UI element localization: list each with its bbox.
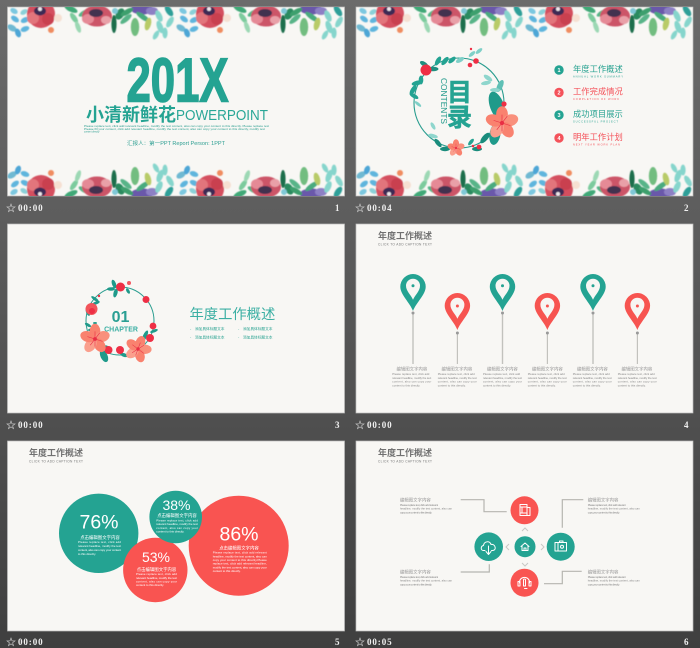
- callout: bottom right: headline, modify the text content, also can: [588, 579, 640, 583]
- direction chevrons: [506, 528, 544, 566]
- slide 1 footer: 00:00: [18, 203, 44, 213]
- pin text 3: content to this directly.: [483, 383, 511, 387]
- bubble 86%: copy your content to this directly.Please: [213, 558, 267, 562]
- icon: cloud download: [474, 532, 503, 561]
- item 4: NEXT YEAR WORK PLAN: [573, 142, 620, 146]
- item 3: 3: [557, 113, 561, 119]
- pin text 1: relevant headline, modify the text: [392, 376, 432, 380]
- slide 2 footer: [356, 203, 689, 213]
- callout: bottom left: 编辑图文字内容: [400, 568, 431, 576]
- slide 4 heading: 年度工作概述: [378, 230, 432, 241]
- pin 5: [580, 274, 606, 364]
- slide 5 footer: 5: [335, 637, 340, 647]
- pin 6: [625, 293, 650, 364]
- callout: top left: 编辑图文字内容: [400, 496, 431, 504]
- bubble 38%: Please replace text, click add: [156, 518, 198, 522]
- pin text 1: content to this directly.: [392, 383, 421, 387]
- bubble 76%: 点击编辑图文字内容: [80, 534, 120, 541]
- chapter number: 01: [112, 309, 130, 326]
- callout: top right: 编辑图文字内容: [588, 496, 619, 504]
- callout: top left: Please replace text, click add relevant: [400, 503, 438, 507]
- slide 5 footer: [7, 637, 340, 647]
- pin text 6: relevant headline, modify the text: [618, 376, 657, 380]
- pin text 4: [528, 366, 567, 387]
- pin text 6: content, also can copy your: [618, 380, 657, 384]
- slide 3 footer: 3: [335, 420, 340, 430]
- cover year: 201X: [126, 46, 228, 116]
- callout: bottom left: [400, 568, 452, 586]
- slide 6 heading: [378, 447, 432, 464]
- chapter bullets: 添加具体标题文本: [243, 334, 273, 340]
- pin text 2: 编辑图文字内容: [442, 366, 473, 372]
- bubble 38%: 点击编辑图文字内容: [157, 512, 197, 519]
- pin text 6: Please replace text, click add: [618, 372, 655, 376]
- cover presenter: 汇报人：第一PPT Report Person: 1PPT: [127, 140, 225, 147]
- slide 5 heading: 年度工作概述: [29, 447, 83, 458]
- callout: top right: headline, modify the text content, also can: [588, 507, 640, 511]
- contents heading: 目: [447, 79, 472, 107]
- pin 4: [535, 293, 560, 364]
- pin text 1: content, also can copy your: [392, 380, 431, 384]
- callout: bottom left: headline, modify the text content, also can: [400, 579, 452, 583]
- chapter bullets: 添加具体标题文本: [195, 334, 225, 340]
- bubble 38%: content, also can copy your: [156, 526, 198, 530]
- bubble 53%: 点击编辑图文字内容: [137, 566, 177, 573]
- item 2: [554, 86, 623, 101]
- pin text 5: relevant headline, modify the text: [573, 376, 612, 380]
- connector lines: [461, 500, 583, 584]
- slide 3 footer: [7, 420, 340, 430]
- chapter bullets: [190, 326, 273, 340]
- callout: bottom right: [588, 568, 640, 586]
- pin text 4: 编辑图文字内容: [532, 366, 563, 372]
- pin text 1: 编辑图文字内容: [396, 366, 428, 372]
- item 3: [554, 109, 623, 124]
- item 1: 年度工作概述: [573, 64, 623, 74]
- icon: headset: [510, 569, 538, 597]
- bubble 86%: headline, modify the text content, also can: [213, 554, 267, 558]
- contents heading: [439, 78, 472, 132]
- bubble 38%: content to this directly.: [156, 530, 184, 534]
- callout: bottom left: copy your content to this directly.: [400, 582, 432, 586]
- slide 4 footer: 4: [684, 420, 689, 430]
- callout: bottom right: 编辑图文字内容: [588, 568, 619, 576]
- pin text 6: content to this directly.: [618, 383, 646, 387]
- chapter bullets: 添加具体标题文本: [243, 326, 273, 331]
- slide 4 footer: 00:00: [367, 420, 392, 430]
- bubble 86%: modify the text content, also can copy your: [213, 565, 267, 569]
- callout: top left: [400, 496, 452, 514]
- bubble 86%: content to this directly.: [213, 569, 241, 573]
- pin text 6: 编辑图文字内容: [622, 366, 653, 372]
- bubble 53%: [123, 538, 188, 602]
- bubble 76%: to this directly.: [78, 552, 96, 556]
- slide 5: percentage bubbles: [8, 441, 344, 631]
- slide 1 footer: [7, 203, 340, 213]
- pin 3: [490, 274, 515, 364]
- slide 2 footer: 2: [684, 203, 689, 213]
- slide 3: chapter: [8, 224, 344, 413]
- callout: top right: [588, 496, 640, 514]
- pin text 2: content to this directly.: [438, 383, 466, 387]
- contents heading: 录: [447, 104, 472, 132]
- cover description: content directly: [84, 130, 100, 134]
- chapter bullets: -: [238, 336, 240, 340]
- item 4: [554, 132, 623, 146]
- pin text 2: relevant headline, modify the text: [438, 376, 477, 380]
- bubble 38%: [149, 491, 202, 543]
- bubble 76%: 76%: [79, 512, 119, 534]
- pin text 4: content, also can copy your: [528, 380, 567, 384]
- slide 5 footer: 00:00: [18, 637, 44, 647]
- callout: top right: copy your content to this directly.: [588, 510, 620, 514]
- item 1: 1: [557, 68, 561, 74]
- pin text 5: content to this directly.: [573, 383, 601, 387]
- slide 5 heading: [29, 447, 83, 464]
- icon: camera: [547, 533, 575, 561]
- slide 4 footer: [356, 420, 689, 430]
- callout: top left: headline, modify the text content, also can: [400, 507, 452, 511]
- slide 6: icon diagram: [356, 441, 693, 631]
- slide 2: contents: [355, 0, 693, 203]
- chapter bullets: -: [238, 327, 240, 331]
- item 3: SUCCESSFUL PROJECT: [573, 120, 618, 124]
- cover description: Please fill your content, click add relevant headline, modify the text content, also can copy your content to this directly, modify text: [84, 128, 265, 131]
- bubble 38%: 38%: [162, 497, 191, 513]
- bubble 86%: replace text, click add relevant headline,: [213, 562, 267, 566]
- item 3: 成功项目展示: [573, 109, 623, 119]
- pin text 3: Please replace text, click add: [483, 372, 520, 376]
- pin text 3: content, also can copy your: [483, 380, 522, 384]
- bubble 38%: relevant headline, modify the text: [156, 522, 198, 526]
- pin text 5: 编辑图文字内容: [577, 366, 608, 372]
- slide 3 footer: 00:00: [18, 420, 44, 430]
- pin text 1: Please replace text, click add: [392, 372, 430, 376]
- icon: film: [510, 496, 538, 524]
- chapter bullets: -: [190, 327, 192, 331]
- chapter label: CHAPTER: [104, 326, 138, 334]
- pin text 5: content, also can copy your: [573, 380, 612, 384]
- pin text 6: [618, 366, 657, 387]
- pin text 4: content to this directly.: [528, 383, 556, 387]
- slide 6 heading: CLICK TO ADD CAPTION TEXT: [378, 460, 432, 464]
- cover title: POWERPOINT: [176, 107, 268, 124]
- item 4: 4: [557, 136, 561, 142]
- item 4: 明年工作计划: [573, 132, 623, 142]
- callout: top left: copy your content to this directly.: [400, 510, 432, 514]
- slide 1: cover: [6, 0, 345, 203]
- pin 1: [400, 274, 426, 364]
- bubble 86%: 点击编辑图文字内容: [219, 544, 259, 552]
- contents heading: CONTENTS: [439, 78, 449, 124]
- floral border: contents: [355, 0, 693, 203]
- bubble 86%: Please replace text, click add relevant: [213, 550, 267, 554]
- chapter bullets: -: [190, 336, 192, 340]
- pin text 5: Please replace text, click add: [573, 372, 610, 376]
- cover title: [86, 104, 268, 125]
- bubble 53%: content, also can copy your: [136, 580, 177, 584]
- pin text 2: Please replace text, click add: [438, 372, 475, 376]
- slide 4 heading: [378, 230, 432, 246]
- slide 4: map pins: [356, 224, 693, 413]
- pin 2: [445, 293, 470, 364]
- wreath: contents: [408, 47, 520, 157]
- slide 6 footer: [356, 637, 689, 647]
- cover description: Please replace text, click add relevant headline, modify the text content, also can copy your content to this directly. Please replace text: [84, 125, 269, 128]
- slide 5 heading: CLICK TO ADD CAPTION TEXT: [29, 460, 83, 464]
- pin text 2: [438, 366, 477, 387]
- bubble 76%: Please replace text, click add: [78, 540, 121, 544]
- bubble 53%: relevant headline, modify the text: [136, 576, 177, 580]
- pin text 1: [392, 366, 432, 387]
- callout: bottom left: Please replace text, click add relevant: [400, 575, 438, 579]
- item 1: ANNUAL WORK SUMMARY: [573, 74, 623, 78]
- pin text 5: [573, 366, 612, 387]
- slide 1 footer: 1: [335, 203, 340, 213]
- cover description: [84, 125, 269, 134]
- item 2: 2: [557, 90, 561, 96]
- bubble 53%: content to this directly.: [136, 583, 164, 587]
- slide 2 footer: 00:04: [367, 203, 392, 213]
- bubble 86%: 86%: [219, 524, 259, 546]
- bubble 86%: [189, 496, 289, 596]
- pin text 3: [483, 366, 522, 387]
- pin text 4: relevant headline, modify the text: [528, 376, 567, 380]
- slide 6 footer: 6: [684, 637, 689, 647]
- floral border: cover: [6, 0, 344, 203]
- callout: bottom right: copy your content to this directly.: [588, 582, 620, 586]
- chapter title: 年度工作概述: [190, 306, 275, 323]
- bubble 53%: Please replace text, click add: [136, 572, 177, 576]
- pin text 3: 编辑图文字内容: [487, 366, 518, 372]
- slide 6 footer: 00:05: [367, 637, 392, 647]
- item 2: 工作完成情况: [573, 86, 623, 96]
- bubble 76%: relevant headline, modify the text: [78, 544, 121, 548]
- pin text 2: content, also can copy your: [438, 380, 477, 384]
- bubble 76%: [59, 494, 138, 573]
- wreath: chapter: [79, 279, 158, 367]
- icon: home: [514, 536, 536, 557]
- chapter bullets: 添加具体标题文本: [195, 326, 225, 331]
- bubble 76%: content, also can copy your content: [78, 548, 121, 552]
- pin text 4: Please replace text, click add: [528, 372, 565, 376]
- callout: bottom right: Please replace text, click add relevant: [588, 575, 626, 579]
- slide 4 heading: CLICK TO ADD CAPTION TEXT: [378, 242, 432, 246]
- contents list: [554, 64, 623, 146]
- bubble 53%: 53%: [142, 549, 170, 565]
- slide 6 heading: 年度工作概述: [378, 447, 432, 458]
- item 1: [554, 64, 623, 78]
- item 2: COMPLETION OF WORK: [573, 97, 619, 101]
- pin text 3: relevant headline, modify the text: [483, 376, 522, 380]
- cover title: 小清新鲜花: [86, 104, 176, 125]
- callout: top right: Please replace text, click add relevant: [588, 503, 626, 507]
